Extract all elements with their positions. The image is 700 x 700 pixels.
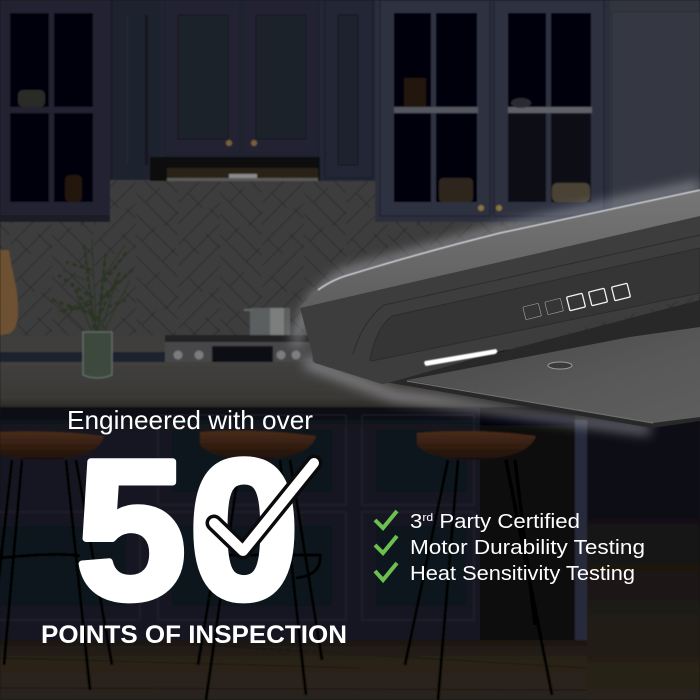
wooden vase [0,250,18,335]
small range hood in scene [150,157,320,181]
filter frame line [407,381,653,423]
cooking pot [244,308,290,340]
island end panel [575,420,587,668]
bar stools [0,431,552,700]
feature: third party certified: Party Certified [433,511,580,533]
centre double door cabinet [160,0,320,157]
hood top surface [300,190,700,309]
button 1 [523,303,541,320]
big number 50: 0 [189,419,299,640]
hood filter panel [407,327,700,423]
bright top edge [318,190,700,290]
floor [0,640,587,700]
range hood product [300,190,700,428]
icon: green check 1 [375,511,397,528]
feature: heat sensitivity testing: Heat Sensitivity Testing [410,563,635,585]
hood underside frame [385,300,700,428]
back counter [0,336,170,364]
island cabinet front [0,407,580,668]
heading: engineered with over: Engineered with over [67,405,313,435]
plant sprigs [48,240,134,345]
hood glow outline [296,186,700,430]
icon: check mark over zero [214,463,314,551]
button 3 [567,293,585,311]
front recessed panel [370,248,700,361]
upper left glass cabinet [0,0,110,222]
feature: motor durability testing: Motor Durability Testing [410,537,645,559]
upper far right panel [610,0,700,220]
LED light bar [424,349,497,366]
front groove line [353,235,700,354]
control button row [523,283,630,320]
upper right glass cabinet [375,0,610,222]
island counter [0,362,700,407]
glass vase on island [83,332,112,378]
upper narrow cabinet left [113,0,160,180]
big number 50: 5 [76,419,186,640]
feature: third party certified: rd [422,512,433,524]
wall cabinets base [0,0,700,222]
button 4 [589,288,607,306]
button 2 [545,298,563,315]
vent ring [548,362,572,369]
feature list [375,511,645,585]
stove [165,335,313,364]
floor right of island [587,407,700,700]
button 5 [612,283,630,301]
tiled backsplash [0,180,700,350]
icon: green check 2 [375,536,397,553]
upper narrow cabinet right [320,0,375,181]
hood front face [300,216,700,384]
subheading: points of inspection: POINTS OF INSPECTION [41,621,347,649]
feature: third party certified: 3 [410,511,421,533]
icon: green check 3 [375,563,397,580]
